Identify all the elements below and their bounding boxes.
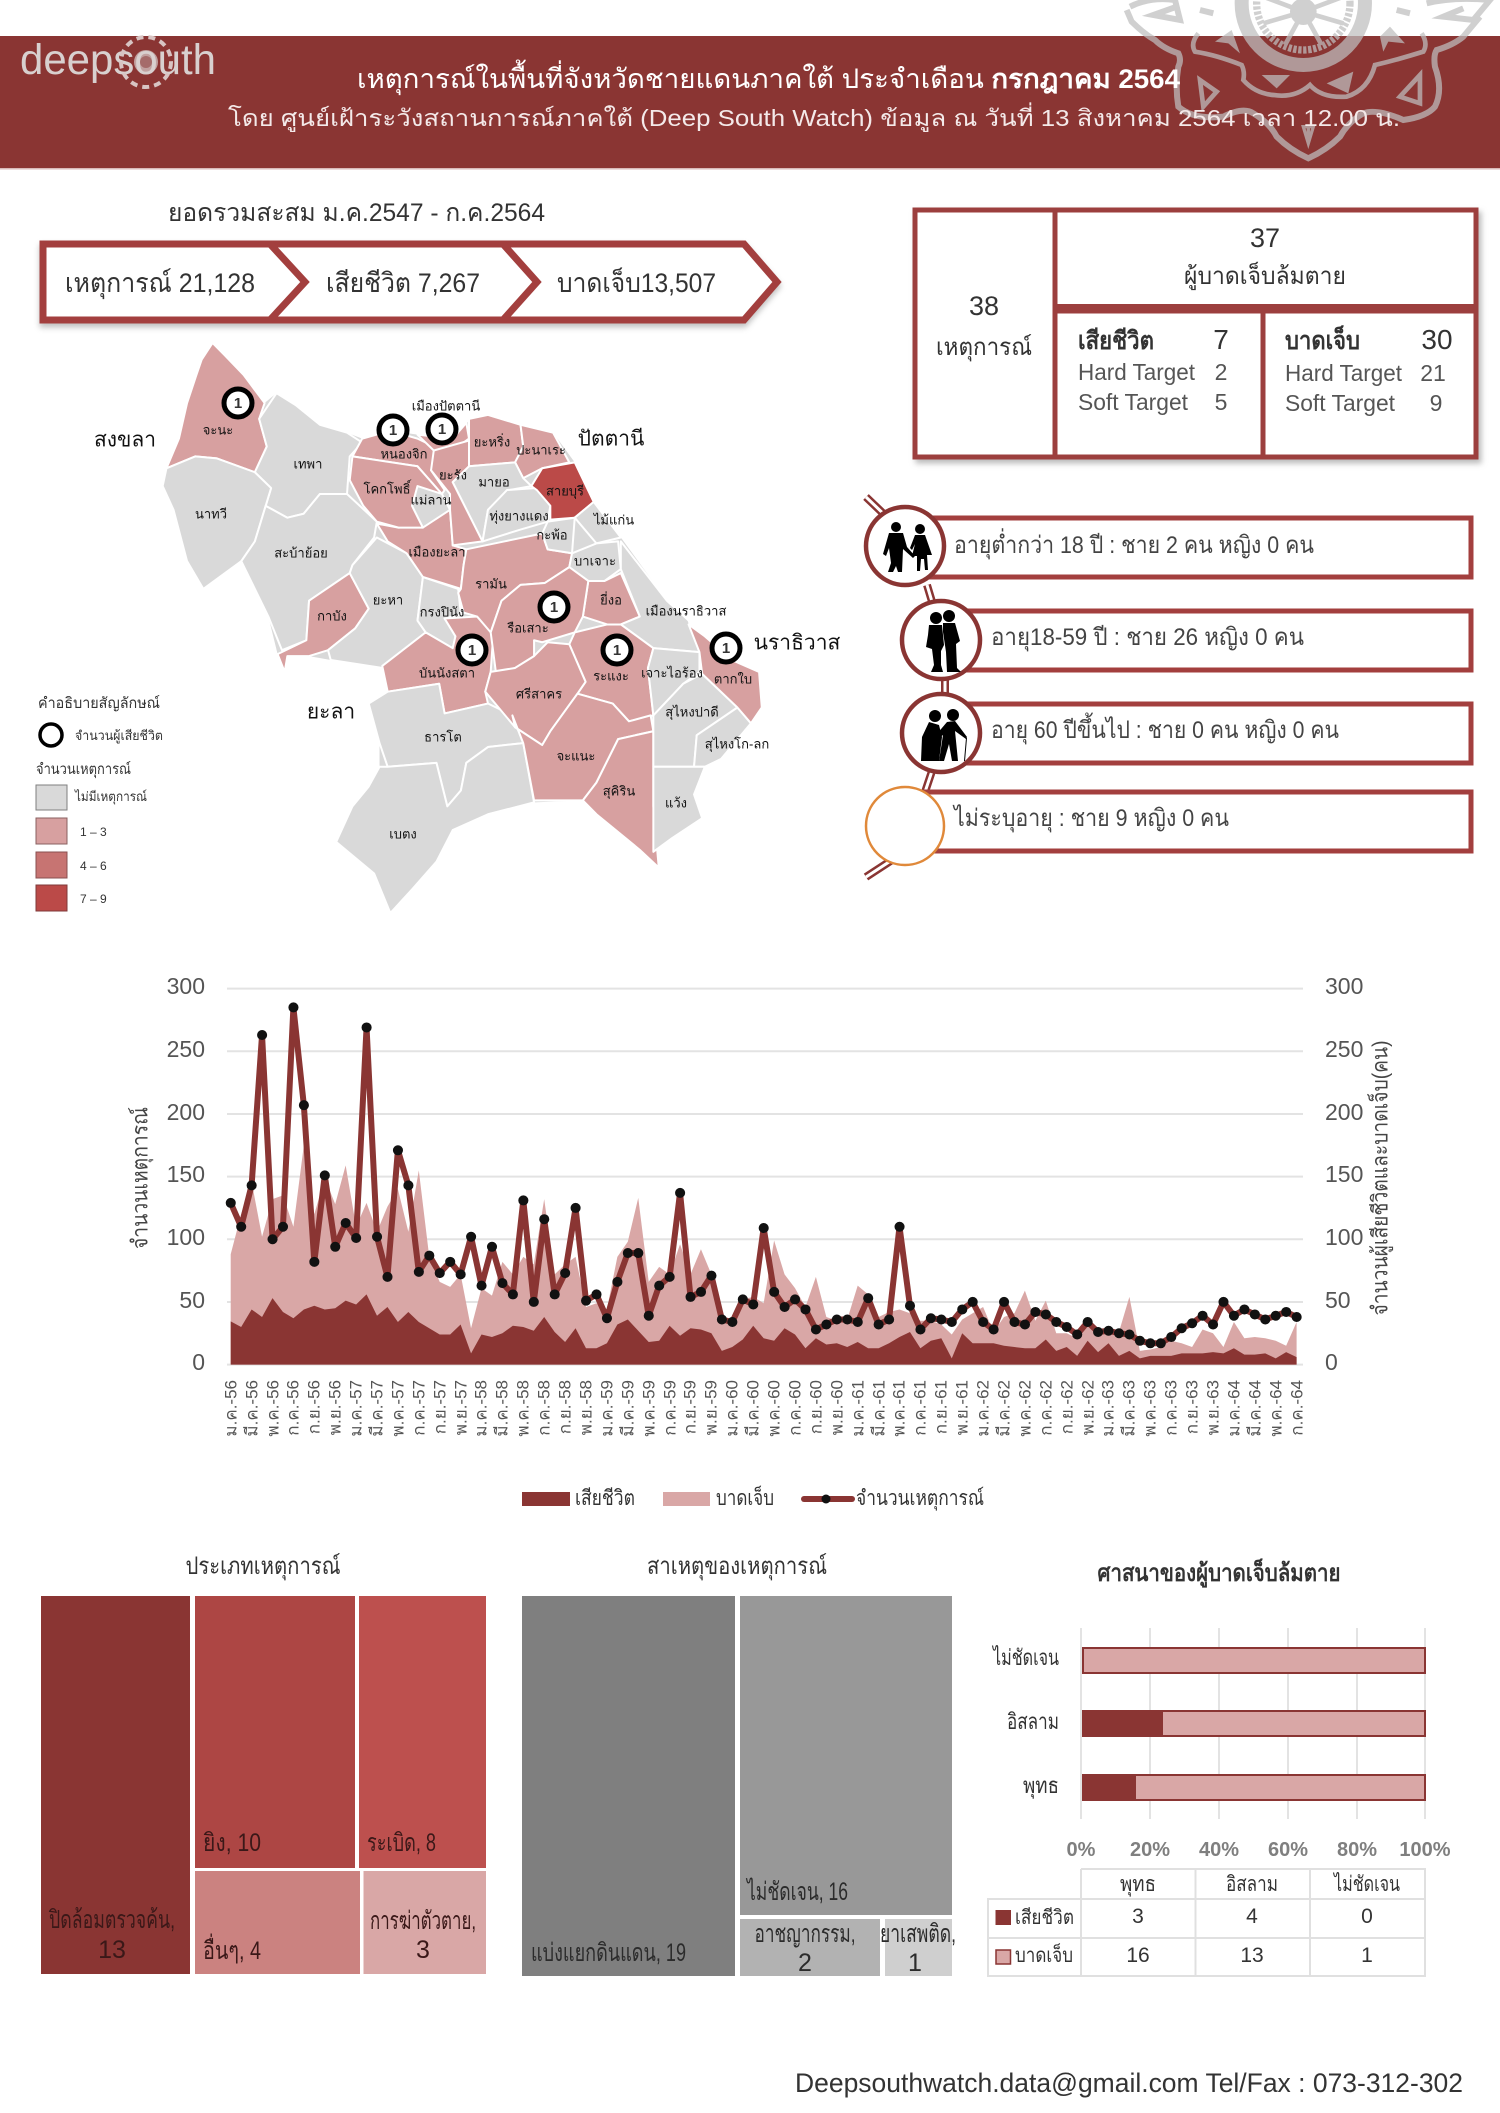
text: 18-59: อายุ18-59 ปี : ชาย 26 หญิง 0 คน (991, 624, 1304, 652)
treemap: event types: 13 (98, 1936, 126, 1964)
decorative mandala ornament (1127, 0, 1490, 158)
right axis labels: 100 (1325, 1224, 1363, 1250)
map legend: 7 – 9 (80, 892, 107, 906)
map of southern border provinces: 1 (550, 599, 558, 616)
right axis labels: 300 (1325, 973, 1363, 999)
province labels (94, 428, 840, 724)
x axis month labels: พ.ค.-61 (890, 1380, 908, 1437)
text: 60 and over: อายุ 60 ปีขึ้นไป : ชาย 0 คน หญิง 0 คน (991, 712, 1339, 745)
x axis month labels: ก.ค.-56 (284, 1380, 302, 1436)
left axis labels (167, 973, 205, 1375)
left axis labels: 100 (167, 1224, 205, 1250)
treemap: event types: ระเบิด, 8 (367, 1829, 436, 1857)
x axis month labels: พ.ค.-63 (1140, 1380, 1160, 1437)
x axis month labels (222, 1380, 1306, 1437)
x axis month labels: พ.ค.-60 (764, 1380, 784, 1437)
x axis month labels: ก.ย.-63 (1182, 1380, 1202, 1434)
stat: casualties this month: 37 (1250, 223, 1280, 253)
heading: religion of casualties: ศาสนาของผู้บาดเจ็บล้มตาย (1098, 1558, 1340, 1588)
x axis month labels: ก.ย.-59 (680, 1380, 700, 1434)
stat: incidents this month: เหตุการณ์ (936, 333, 1032, 362)
x axis month labels: ก.ย.-62 (1058, 1380, 1076, 1434)
district labels: เมืองยะลา (408, 544, 466, 560)
icon: elderly (902, 694, 980, 772)
combo chart: monthly events and casualties (128, 973, 1394, 1511)
x axis month labels: ม.ค.-60 (722, 1380, 742, 1437)
x axis month labels: มี.ค.-56 (242, 1380, 262, 1437)
map of southern border provinces: 1 (389, 422, 397, 439)
district labels: นาทวี (195, 506, 227, 522)
left axis labels: 50 (179, 1287, 205, 1313)
x axis month labels: ม.ค.-58 (472, 1380, 490, 1437)
district labels: สะบ้าย้อย (274, 546, 328, 560)
x axis month labels: มี.ค.-61 (870, 1380, 888, 1437)
right axis title: จำนวนผู้เสียชีวิตและบาดเจ็บ(คน) (1366, 1040, 1394, 1316)
panel: monthly incident and casualty box (915, 210, 1478, 457)
treemap: event causes: อาชญากรรม, (754, 1920, 856, 1948)
data table: religion: อิสลาม (1226, 1873, 1278, 1896)
treemap: event causes (522, 1596, 956, 1977)
text: under 18: อายุต่ำกว่า 18 ปี : ชาย 2 คน หญิง 0 คน (954, 528, 1314, 560)
map of southern border provinces: 1 (613, 642, 621, 659)
bar: unclear religion (1083, 1648, 1425, 1673)
district labels: ยะรัง (439, 468, 467, 482)
stat: deaths by target: Soft Target (1078, 389, 1189, 415)
percent axis labels: 20% (1130, 1839, 1170, 1861)
left axis labels: 150 (167, 1161, 205, 1187)
treemap: event types (41, 1596, 486, 1974)
province labels: นราธิวาส (754, 632, 840, 654)
cumulative totals heading: ยอดรวมสะสม ม.ค.2547 - ก.ค.2564 (168, 199, 545, 227)
area: injured (231, 1145, 1297, 1365)
x axis month labels: พ.ค.-58 (514, 1380, 532, 1437)
data table: religion: 3 (1132, 1905, 1144, 1928)
x axis month labels: ม.ค.-57 (346, 1380, 366, 1437)
x axis month labels: มี.ค.-58 (492, 1380, 512, 1437)
left axis labels: 0 (192, 1349, 205, 1375)
district labels: กะพ้อ (536, 528, 568, 542)
x axis month labels: ก.ค.-64 (1288, 1380, 1306, 1436)
x axis month labels: ก.ค.-60 (786, 1380, 804, 1436)
stat: deaths by target: Hard Target (1078, 359, 1196, 385)
district labels: รามัน (475, 576, 507, 592)
district labels: ยี่งอ (600, 592, 622, 608)
x axis month labels: ก.ย.-58 (556, 1380, 574, 1434)
stat: events total: เหตุการณ์ 21,128 (65, 267, 255, 300)
map legend: 1 – 3 (80, 825, 107, 839)
map legend: จำนวนผู้เสียชีวิต (75, 728, 163, 744)
treemap: event causes: 1 (908, 1949, 922, 1977)
panel: age breakdown (866, 497, 1471, 877)
stat: deaths by target: 2 (1215, 359, 1227, 385)
percent axis labels: 40% (1199, 1839, 1239, 1861)
x axis month labels: พ.ค.-62 (1016, 1380, 1034, 1437)
district labels: กาบัง (317, 608, 347, 624)
left axis title: จำนวนเหตุการณ์ (128, 1107, 154, 1249)
x axis month labels: ม.ค.-59 (598, 1380, 616, 1437)
map legend (36, 695, 163, 911)
line markers (231, 1007, 1297, 1343)
x axis month labels: พ.ย.-56 (326, 1380, 344, 1435)
district labels: สายบุรี (546, 484, 584, 500)
percent axis labels: 100% (1399, 1839, 1451, 1861)
data table: religion: 13 (1240, 1944, 1264, 1967)
district labels: เบตง (389, 826, 417, 842)
stat: deaths by target: เสียชีวิต (1078, 327, 1154, 355)
x axis month labels: พ.ย.-60 (828, 1380, 846, 1435)
district labels: เทพา (294, 456, 322, 472)
x axis month labels: มี.ค.-62 (994, 1380, 1014, 1437)
data table: religion: ไม่ชัดเจน (1332, 1872, 1400, 1896)
district labels: จะแนะ (557, 748, 595, 764)
district labels: แว้ง (665, 796, 687, 810)
data table: religion (988, 1869, 1425, 1976)
x axis month labels: ม.ค.-64 (1224, 1380, 1244, 1437)
stat: injured by target: 30 (1421, 324, 1453, 355)
x axis month labels: พ.ย.-57 (452, 1380, 470, 1435)
map legend: 4 – 6 (80, 859, 107, 873)
district labels: ปะนาเระ (516, 442, 566, 458)
district labels: หนองจิก (380, 446, 428, 462)
x axis month labels: ม.ค.-56 (222, 1380, 240, 1437)
chart legend: บาดเจ็บ (716, 1484, 774, 1510)
area: deaths (231, 1294, 1297, 1365)
treemap: event causes: ไม่ชัดเจน, 16 (746, 1877, 848, 1906)
x axis month labels: พ.ย.-62 (1078, 1380, 1098, 1435)
cumulative total chevrons (43, 244, 777, 320)
province labels: ยะลา (307, 700, 355, 724)
stacked bar chart: religion (992, 1628, 1451, 1861)
x axis month labels: มี.ค.-57 (368, 1380, 386, 1437)
stat: casualties this month: ผู้บาดเจ็บล้มตาย (1184, 261, 1346, 291)
district labels: จะนะ (203, 422, 233, 438)
district labels: ศรีสาคร (516, 686, 562, 702)
x axis month labels: ก.ค.-62 (1036, 1380, 1056, 1436)
x axis month labels: ก.ย.-60 (806, 1380, 826, 1434)
treemap: event causes: แบ่งแยกดินแดน, 19 (531, 1939, 686, 1967)
treemap: event types: การฆ่าตัวตาย, (370, 1907, 476, 1935)
stat: injured by target: Hard Target (1285, 360, 1403, 386)
left axis labels: 200 (167, 1099, 205, 1125)
left axis labels: 250 (167, 1036, 205, 1062)
category labels: อิสลาม (1007, 1709, 1059, 1734)
map legend: คำอธิบายสัญลักษณ์ (38, 695, 160, 712)
district labels: เจาะไอร้อง (641, 666, 703, 680)
treemap: event types: ปิดล้อมตรวจค้น, (49, 1906, 175, 1934)
x axis month labels: ก.ย.-56 (304, 1380, 324, 1434)
percent axis labels: 80% (1337, 1839, 1377, 1861)
district labels: สุคิริน (603, 784, 635, 800)
percent axis labels: 0% (1067, 1839, 1096, 1861)
text: age unspecified: ไม่ระบุอายุ : ชาย 9 หญิง 0 คน (952, 804, 1229, 833)
data table: religion: 0 (1361, 1905, 1373, 1928)
icon: unspecified age (866, 787, 944, 865)
district labels: สุไหงปาดี (665, 704, 719, 720)
x axis month labels: พ.ค.-59 (640, 1380, 658, 1437)
x axis month labels: ม.ค.-63 (1098, 1380, 1118, 1437)
stat: injured by target: 21 (1420, 360, 1446, 386)
x axis month labels: พ.ค.-56 (264, 1380, 282, 1437)
right axis labels: 200 (1325, 1099, 1363, 1125)
district labels: บันนังสตา (419, 666, 475, 680)
x axis month labels: ก.ค.-59 (660, 1380, 680, 1436)
category labels (992, 1645, 1059, 1799)
province labels: สงขลา (94, 428, 156, 452)
district labels: รือเสาะ (506, 620, 549, 636)
treemap: event causes: ยาเสพติด, (880, 1920, 956, 1948)
district labels: กรงปินัง (420, 604, 464, 620)
data table: religion: บาดเจ็บ (1015, 1942, 1073, 1967)
x axis month labels: พ.ค.-57 (388, 1380, 408, 1437)
chart gridlines (227, 989, 1303, 1365)
map of southern border provinces: 1 (438, 421, 446, 438)
x axis month labels: พ.ย.-61 (952, 1380, 972, 1435)
stat: deaths by target: 5 (1215, 389, 1227, 415)
category labels: พุทธ (1023, 1773, 1059, 1799)
x axis month labels: ม.ค.-62 (974, 1380, 992, 1437)
icon: adults (902, 601, 980, 679)
header banner (0, 36, 1500, 170)
x axis month labels: ก.ย.-57 (430, 1380, 450, 1434)
stat: injured by target (1285, 324, 1453, 416)
district labels: ทุ่งยางแดง (489, 508, 549, 524)
district labels: ระแงะ (593, 668, 629, 684)
treemap: event types: ยิง, 10 (203, 1829, 261, 1857)
treemap: event types: อื่นๆ, 4 (203, 1933, 261, 1965)
data table: religion: 1 (1361, 1944, 1373, 1967)
bar: Buddhist (1082, 1774, 1425, 1801)
icon: children (866, 507, 944, 585)
title line 2: โดย ศูนย์เฝ้าระวังสถานการณ์ภาคใต้ (Deep South Watch) ข้อมูล ณ วันที่ 13 สิงหาคม 2564 เวลา 12.00 น. (228, 102, 1400, 132)
right axis labels: 150 (1325, 1161, 1363, 1187)
district labels: เมืองนราธิวาส (646, 604, 726, 618)
stat: injured by target: บาดเจ็บ (1285, 325, 1360, 355)
x axis month labels: ก.ค.-61 (910, 1380, 930, 1436)
district labels (195, 398, 769, 842)
x axis month labels: ก.ค.-57 (410, 1380, 428, 1436)
map of southern border provinces: 1 (722, 640, 730, 657)
stat: casualties this month (1184, 223, 1346, 291)
district labels: ยะหา (373, 592, 403, 608)
data table: religion: 16 (1126, 1944, 1150, 1967)
map of southern border provinces: 1 (468, 642, 476, 659)
data table: religion: พุทธ (1120, 1873, 1156, 1897)
data table: religion: 4 (1246, 1905, 1258, 1928)
x axis month labels: พ.ย.-59 (702, 1380, 720, 1435)
map legend: ไม่มีเหตุการณ์ (74, 789, 147, 805)
district labels: บาเจาะ (574, 554, 616, 568)
x axis month labels: มี.ค.-64 (1246, 1380, 1264, 1437)
x axis month labels: ม.ค.-61 (848, 1380, 868, 1437)
data table: religion: เสียชีวิต (1015, 1907, 1074, 1929)
title line 1: เหตุการณ์ในพื้นที่จังหวัดชายแดนภาคใต้ ประจำเดือน กรกฎาคม 2564 (357, 59, 1180, 96)
stat: injured by target: Soft Target (1285, 390, 1396, 416)
x axis month labels: พ.ย.-63 (1204, 1380, 1222, 1435)
x axis month labels: พ.ค.-64 (1266, 1380, 1286, 1437)
treemap heading: event causes: สาเหตุของเหตุการณ์ (647, 1552, 827, 1581)
chart legend: เสียชีวิต (575, 1487, 635, 1510)
district labels: ตากใบ (714, 672, 752, 686)
bar: Islam (1082, 1710, 1425, 1737)
x axis month labels: มี.ค.-60 (744, 1380, 762, 1437)
treemap: event causes: 2 (798, 1949, 812, 1977)
percent axis labels: 60% (1268, 1839, 1308, 1861)
death count markers (224, 389, 740, 664)
x axis month labels: ก.ค.-63 (1162, 1380, 1180, 1436)
x axis month labels: มี.ค.-59 (618, 1380, 638, 1437)
x axis month labels: มี.ค.-63 (1120, 1380, 1138, 1437)
district labels: มายอ (478, 474, 510, 490)
right axis labels: 50 (1325, 1287, 1351, 1313)
right axis labels (1325, 973, 1363, 1375)
map of southern border provinces: 1 (234, 395, 242, 412)
map legend: จำนวนเหตุการณ์ (36, 761, 131, 779)
x axis month labels: ก.ย.-61 (932, 1380, 950, 1434)
stat: injured by target: 9 (1430, 390, 1442, 416)
x axis month labels: พ.ย.-58 (576, 1380, 596, 1435)
right axis labels: 250 (1325, 1036, 1363, 1062)
stat: deaths by target (1078, 324, 1229, 415)
treemap heading: event types: ประเภทเหตุการณ์ (186, 1552, 340, 1581)
stat: injured total: บาดเจ็บ13,507 (557, 265, 716, 298)
district labels: สุไหงโก-ลก (705, 736, 769, 752)
treemap: event types: 3 (416, 1936, 430, 1964)
footer contact: Deepsouthwatch.data@gmail.com Tel/Fax : 073-312-302 (795, 2068, 1463, 2098)
district labels: ธารโต (424, 730, 462, 744)
district labels: เมืองปัตตานี (412, 398, 480, 414)
district labels: แม่ลาน (410, 492, 452, 508)
percent axis labels (1067, 1839, 1451, 1861)
chart legend: จำนวนเหตุการณ์ (856, 1486, 984, 1511)
line: events (231, 1007, 1297, 1343)
map of southern border provinces (94, 343, 840, 913)
province labels: ปัตตานี (578, 428, 644, 450)
stat: incidents this month (936, 291, 1032, 362)
stat: incidents this month: 38 (969, 291, 999, 321)
stat: deaths by target: 7 (1213, 324, 1229, 355)
right axis labels: 0 (1325, 1349, 1338, 1375)
district labels: ยะหริ่ง (474, 434, 510, 450)
category labels: ไม่ชัดเจน (992, 1645, 1059, 1670)
district labels: ไม้แก่น (593, 512, 634, 528)
left axis labels: 300 (167, 973, 205, 999)
x axis month labels: ก.ค.-58 (534, 1380, 554, 1436)
district labels: โคกโพธิ์ (363, 480, 412, 496)
stat: deaths total: เสียชีวิต 7,267 (326, 268, 480, 298)
chart legend (522, 1484, 984, 1511)
logo: deepsouth: deepsouth (20, 36, 216, 84)
